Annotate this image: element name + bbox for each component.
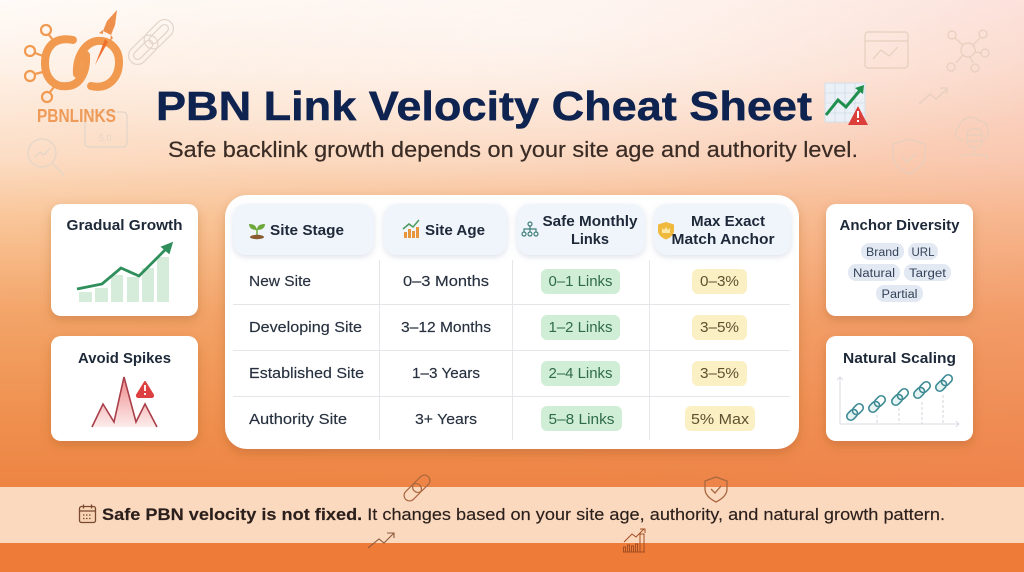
header: Safe Monthly Links [517,204,645,255]
faint background icons: top right [865,30,989,174]
row: New Site: 0–3% [700,274,739,290]
icon: chart with warning [825,83,868,125]
row: Authority Site [249,406,755,431]
row: Authority Site: 3+ Years [415,412,477,428]
header: Safe Monthly Links: Safe Monthly [542,213,638,230]
card: Natural Scaling [826,336,973,441]
logo: PBNLINKS: PBNLINKS [37,106,116,126]
header: Site Stage [233,204,374,255]
icon: footer bar chart [623,529,645,552]
card: Gradual Growth: Gradual Growth [66,217,182,234]
card: Anchor Diversity [826,204,973,316]
logo: PBNLINKS [25,10,119,126]
card: Natural Scaling: Natural Scaling [843,350,956,367]
row: Developing Site: Developing Site [249,320,362,336]
row: Established Site: 2–4 Links [548,366,612,382]
card: Avoid Spikes [51,336,198,441]
icon: footer link [402,473,432,503]
row: New Site: 0–1 Links [548,274,612,290]
row: Developing Site: 1–2 Links [548,320,612,336]
row: Authority Site: Authority Site [249,412,347,428]
row: Developing Site: 3–12 Months [401,320,491,336]
row: Developing Site: 3–5% [700,320,739,336]
row: Established Site: 1–3 Years [412,366,480,382]
anchor type tags [848,243,951,302]
card: Anchor Diversity: Anchor Diversity [840,217,960,234]
row: Developing Site [249,315,747,340]
header: Max Exact Match Anchor [654,204,791,255]
chart: growth bars and line [77,243,172,302]
row: Established Site: 3–5% [700,366,739,382]
anchor type tags: Partial [882,289,918,301]
row: Authority Site: 5–8 Links [548,412,614,428]
icon: footer trend arrow [368,533,394,548]
anchor type tags: URL [912,247,935,259]
faint background icons: top left [28,16,177,175]
anchor type tags: Brand [866,247,899,259]
footer message: Safe PBN velocity is not fixed. It changes based on your site age, authority, and natural growth pattern. [102,505,945,524]
row: Established Site: Established Site [249,366,364,382]
table grid lines [233,260,790,440]
row: New Site: New Site [249,274,311,290]
header: Max Exact Match Anchor: Match Anchor [672,231,775,248]
icon: footer shield [705,477,727,502]
anchor type tags: Natural [853,268,895,280]
title: PBN Link Velocity Cheat Sheet [156,83,812,129]
header: Site Stage: Site Stage [270,222,344,239]
header: Safe Monthly Links: Links [571,231,609,248]
chart: spikes with warning [92,377,157,427]
row: Authority Site: 5% Max [691,412,750,428]
row: New Site: 0–3 Months [403,274,489,290]
row: New Site [249,269,747,294]
footer band [0,487,1024,572]
chart: rising links [837,373,959,427]
icon: calendar [80,504,96,522]
panel: velocity table [225,195,799,449]
anchor type tags: Target [909,268,947,280]
header: Site Age [384,204,507,255]
subtitle: Safe backlink growth depends on your site age and authority level. [168,137,858,162]
header: Max Exact Match Anchor: Max Exact [691,213,765,230]
row: Established Site [249,361,747,386]
header: Site Age: Site Age [425,222,485,239]
faint background icons: top left: 5.0 [99,133,112,143]
card: Gradual Growth [51,204,198,316]
card: Avoid Spikes: Avoid Spikes [78,350,171,367]
